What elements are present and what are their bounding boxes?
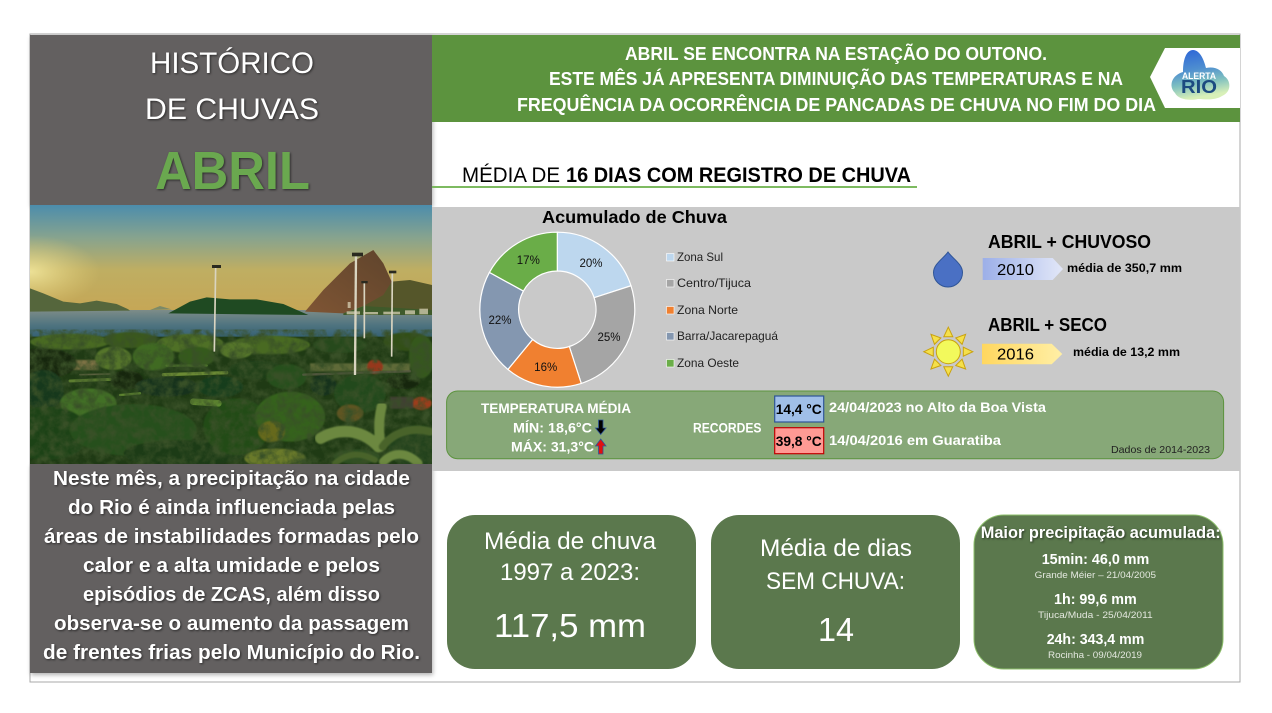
text block: description: observa-se o aumento da passagem [54, 613, 409, 635]
record: 1 hour: Tijuca/Muda - 25/04/2011 [1038, 610, 1153, 621]
donut chart: rain by zone: 20% [579, 258, 603, 270]
text block: description: áreas de instabilidades formadas pelo [44, 526, 419, 548]
record: maximum: 14/04/2016 em Guaratiba [829, 433, 1002, 448]
average temperature: MÁX: 31,3°C [511, 440, 594, 454]
donut chart: rain by zone [480, 232, 635, 387]
chart legend: Zona Oeste [677, 356, 739, 370]
record: maximum [775, 428, 1002, 454]
panel: average rainfall: Média de chuva [484, 528, 657, 555]
text block: description: calor e a alta umidade e pelos [83, 555, 380, 577]
record: minimum: 24/04/2023 no Alto da Boa Vista [829, 400, 1047, 415]
panel: left title [30, 35, 432, 205]
record: maximum: 39,8 °C [776, 433, 822, 449]
logo: Alerta Rio: ALERTA [1182, 71, 1216, 81]
record: 24 hours [1047, 632, 1144, 661]
icon: down arrow [596, 420, 606, 434]
logo: Alerta Rio [1150, 48, 1240, 108]
icon: up arrow [596, 439, 606, 454]
record: minimum [775, 396, 1047, 422]
donut chart: rain by zone: 16% [534, 362, 557, 374]
heading: média de dias com chuva: 16 DIAS COM REGISTRO DE CHUVA [566, 164, 911, 187]
text block: header message [517, 43, 1156, 115]
driest april: média de 13,2 mm [1073, 347, 1180, 359]
panel: average rainfall: 117,5 mm [494, 607, 646, 644]
donut chart: rain by zone: 25% [597, 332, 621, 344]
icon: water drop [934, 252, 962, 287]
record: 15 minutes [1035, 552, 1156, 581]
panel: average rainfall [447, 515, 696, 669]
panel: days without rain: 14 [818, 611, 854, 648]
panel: temperature [447, 391, 1224, 459]
heading: histórico de chuvas: HISTÓRICO [150, 47, 314, 80]
panel: days without rain: SEM CHUVA: [766, 568, 905, 595]
text block: header message: ABRIL SE ENCONTRA NA ESTAÇÃO DO OUTONO. [625, 43, 1047, 64]
record: 1 hour [1038, 592, 1153, 621]
text block: description: de frentes frias pelo Município do Rio. [43, 642, 420, 664]
record: 24 hours: Rocinha - 09/04/2019 [1048, 650, 1142, 661]
driest april: 2016 [997, 346, 1034, 364]
logo: Alerta Rio: RIO [1181, 77, 1217, 97]
panel: days without rain [711, 515, 960, 669]
heading: média de dias com chuva: MÉDIA DE [462, 164, 560, 187]
chart legend: Barra/Jacarepaguá [677, 329, 778, 343]
driest april [982, 314, 1180, 364]
heading: média de dias com chuva [432, 164, 917, 188]
palm fronds [321, 407, 430, 463]
chart legend: Zona Norte [677, 303, 738, 317]
heading: histórico de chuvas [145, 47, 319, 126]
data source note: Dados de 2014-2023 [1111, 444, 1210, 456]
panel: highest accumulated rainfall [974, 515, 1223, 669]
panel: left description [30, 464, 432, 673]
text block: header message: ESTE MÊS JÁ APRESENTA DIMINUIÇÃO DAS TEMPERATURAS E NA [549, 68, 1123, 89]
wettest april: 2010 [997, 262, 1034, 279]
average temperature [481, 401, 631, 454]
chart legend: Zona Sul [677, 250, 723, 264]
records label: RECORDES [693, 420, 762, 436]
record: 15 minutes: Grande Méier – 21/04/2005 [1035, 570, 1156, 581]
heading: histórico de chuvas: DE CHUVAS [145, 93, 319, 126]
heading: abril: ABRIL [155, 141, 310, 201]
panel: average rainfall: 1997 a 2023: [500, 559, 640, 586]
panel: days without rain: Média de dias [760, 535, 912, 562]
record: 15 minutes: 15min: 46,0 mm [1042, 552, 1149, 568]
text block: header message: FREQUÊNCIA DA OCORRÊNCIA DE PANCADAS DE CHUVA NO FIM DO DIA [517, 94, 1156, 115]
chart legend [666, 250, 778, 370]
record: 1 hour: 1h: 99,6 mm [1054, 592, 1137, 608]
text block: description: Neste mês, a precipitação na cidade [53, 468, 410, 490]
wettest april: média de 350,7 mm [1067, 263, 1182, 275]
average temperature: TEMPERATURA MÉDIA [481, 401, 631, 416]
wettest april: ABRIL + CHUVOSO [988, 231, 1151, 252]
record: minimum: 14,4 °C [776, 401, 822, 417]
wettest april [983, 231, 1182, 280]
panel: header banner [432, 35, 1240, 122]
panel: highest accumulated rainfall: Maior precipitação acumulada: [981, 523, 1221, 542]
icon: sun [924, 327, 973, 376]
text block: description: episódios de ZCAS, além disso [83, 584, 380, 606]
text block: description: do Rio é ainda influenciada pelas [68, 497, 395, 519]
donut chart: rain by zone: 22% [488, 315, 512, 327]
driest april: ABRIL + SECO [988, 314, 1107, 335]
donut chart: rain by zone: 17% [517, 255, 540, 267]
average temperature: MÍN: 18,6°C [513, 420, 592, 436]
chart legend: Centro/Tijuca [677, 276, 751, 290]
panel: gray statistics band [432, 207, 1240, 471]
text block: description [43, 468, 420, 664]
record: 24 hours: 24h: 343,4 mm [1047, 632, 1144, 648]
photo: Rio bay with Sugarloaf [0, 204, 445, 470]
chart title: Acumulado de Chuva [542, 207, 727, 227]
